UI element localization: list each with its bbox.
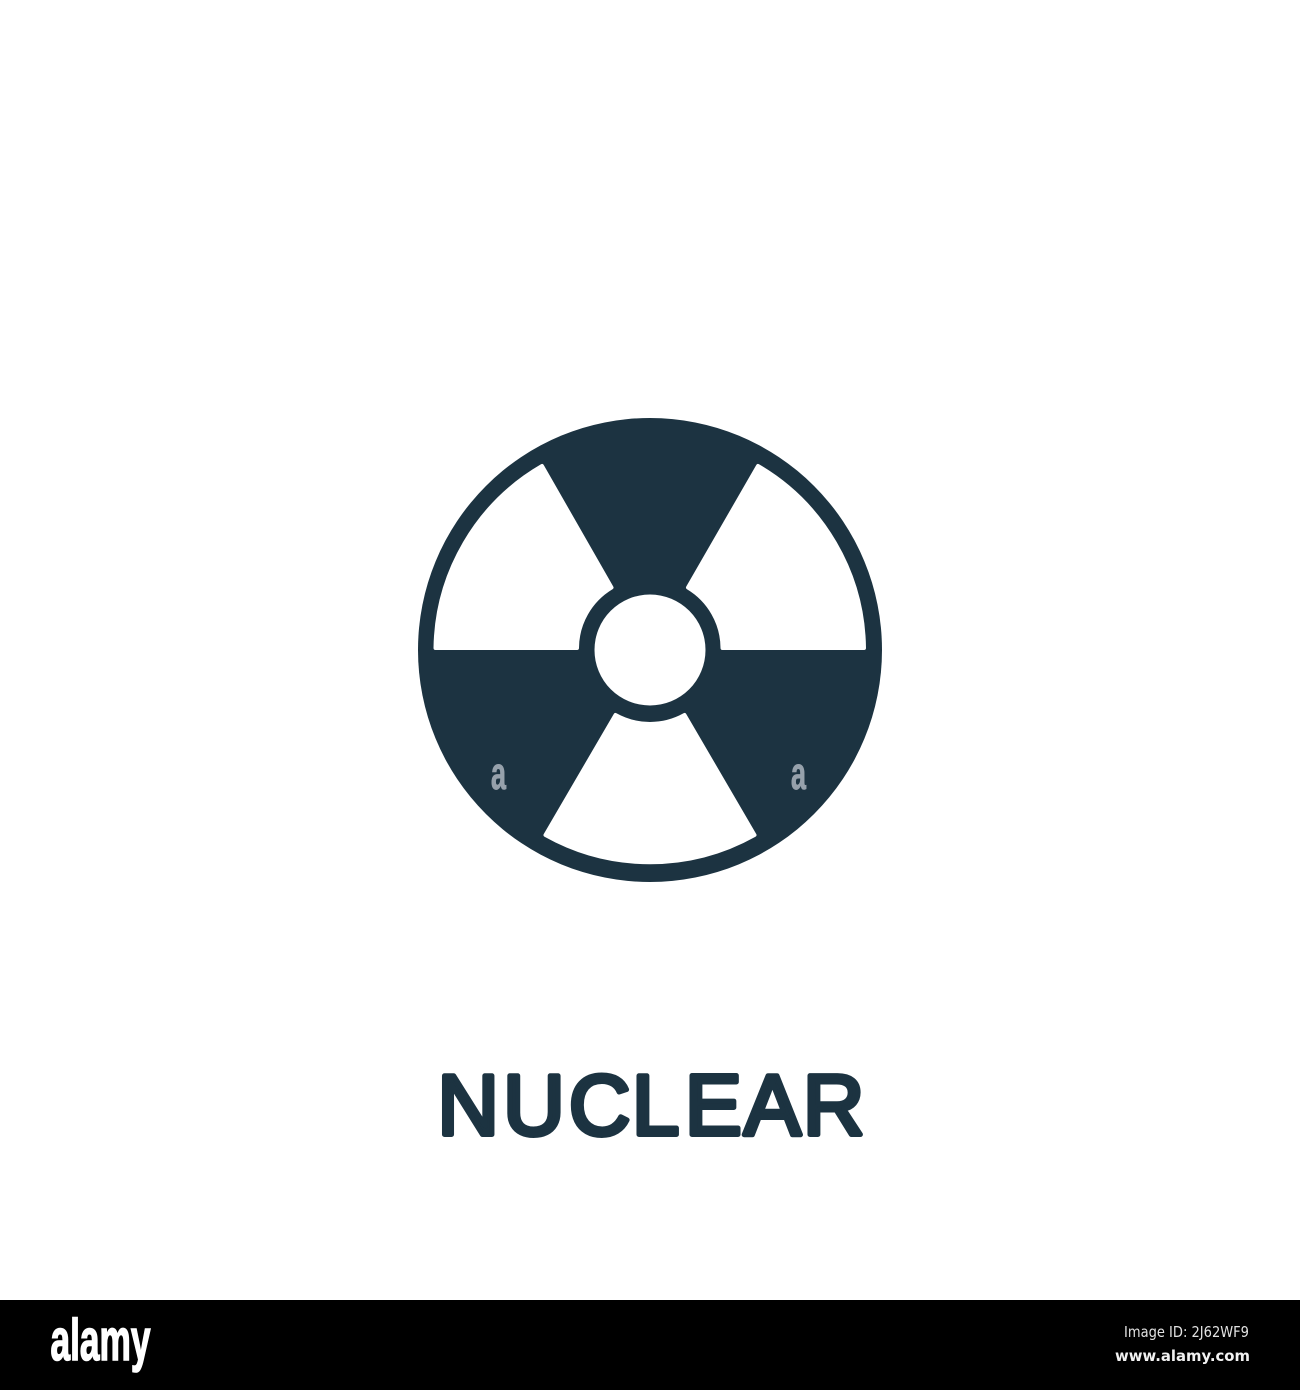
icon: radiation symbol (418, 418, 882, 882)
image id: Image ID: 2J62WF9 (1124, 1323, 1249, 1341)
icon: bottom white blade (546, 715, 754, 862)
footer background (0, 1300, 1300, 1390)
watermark: right letter a: a (791, 748, 807, 799)
icon: center white circle (594, 594, 706, 706)
icon: upper right white blade (688, 466, 864, 648)
logo: alamy: alamy (50, 1308, 150, 1373)
title: NUCLEAR: NUCLEAR (438, 1059, 864, 1154)
icon: outer dark disc (418, 418, 882, 882)
watermark: left letter a: a (491, 748, 507, 799)
website url: www.alamy.com (1115, 1347, 1250, 1365)
icon: upper left white blade (436, 466, 612, 648)
footer band (0, 1300, 1300, 1390)
